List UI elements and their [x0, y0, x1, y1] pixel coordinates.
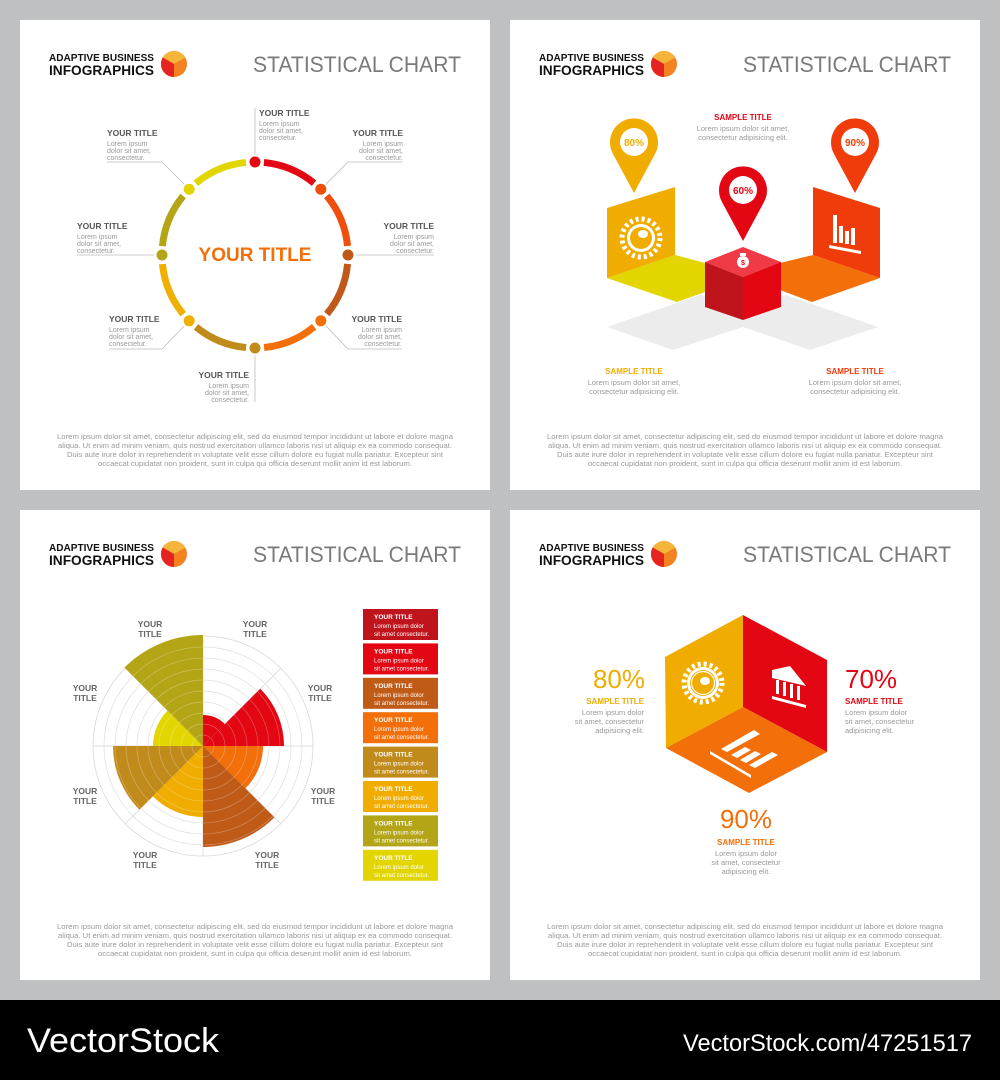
stat 90% — [711, 804, 781, 876]
stat 80%: 80% — [593, 664, 645, 694]
ring labels: Lorem ipsum — [259, 121, 300, 128]
ring labels: dolor sit amet, — [359, 148, 403, 155]
footer text — [57, 922, 454, 958]
stat 90%: sit amet, consectetur — [711, 858, 781, 867]
ring dots — [156, 156, 354, 354]
ring labels: consectetur. — [259, 135, 297, 142]
ring labels: Lorem ipsum — [363, 141, 403, 148]
cube — [665, 615, 827, 793]
stat 70% — [845, 664, 915, 735]
watermark band — [0, 1000, 1000, 1080]
legend: Lorem ipsum dolor — [374, 762, 424, 768]
right wall and floor — [780, 187, 880, 302]
icon: bar chart — [829, 215, 861, 254]
ring labels: YOUR TITLE — [352, 128, 403, 138]
legend: sit amet consectetur. — [374, 804, 429, 810]
stat 90%: SAMPLE TITLE — [717, 838, 776, 847]
stat 70%: 70% — [845, 664, 897, 694]
icon: bank — [772, 666, 806, 708]
legend: sit amet consectetur. — [374, 770, 429, 776]
pin 60%: 60% — [733, 186, 753, 197]
icon: gear — [684, 664, 722, 702]
stat 80%: SAMPLE TITLE — [586, 697, 645, 706]
polar labels: YOUR — [73, 683, 97, 693]
header — [539, 51, 951, 78]
polar labels: YOUR — [255, 850, 279, 860]
ring labels: YOUR TITLE — [198, 370, 249, 380]
ring labels: Lorem ipsum — [107, 141, 148, 148]
legend: YOUR TITLE — [374, 855, 413, 862]
watermark band: VectorStock.com/47251517 — [683, 1030, 972, 1057]
stat 70%: sit amet, consectetur — [845, 717, 915, 726]
legend: Lorem ipsum dolor — [374, 865, 424, 871]
ring labels: YOUR TITLE — [351, 314, 402, 324]
ring labels: consectetur. — [211, 397, 249, 404]
ring labels: dolor sit amet, — [109, 334, 153, 341]
legend: YOUR TITLE — [374, 683, 413, 690]
ring labels: consectetur. — [396, 248, 434, 255]
text: top sample: Lorem ipsum dolor sit amet, — [697, 124, 789, 133]
ring chart — [124, 124, 386, 386]
ring labels: Lorem ipsum — [362, 327, 402, 334]
left wall and floor — [607, 187, 705, 302]
polar labels — [73, 619, 335, 870]
stat 80%: adipisicing elit. — [595, 726, 644, 735]
ring labels: dolor sit amet, — [77, 241, 121, 248]
ring labels: YOUR TITLE — [383, 221, 434, 231]
center title: YOUR TITLE — [199, 245, 311, 266]
panel: polar chart — [20, 510, 490, 980]
ring labels: Lorem ipsum — [394, 234, 434, 241]
text: bottom right sample: Lorem ipsum dolor sit amet, — [809, 378, 901, 387]
pin 90% — [831, 118, 879, 193]
legend: Lorem ipsum dolor — [374, 796, 424, 802]
polar labels: TITLE — [243, 629, 267, 639]
panel: circular chart — [20, 20, 490, 490]
legend: sit amet consectetur. — [374, 873, 429, 879]
text: bottom left sample: Lorem ipsum dolor sit amet, — [588, 378, 680, 387]
legend: sit amet consectetur. — [374, 632, 429, 638]
legend — [363, 609, 438, 881]
legend: Lorem ipsum dolor — [374, 693, 424, 699]
stat 80%: Lorem ipsum dolor — [582, 708, 645, 717]
legend: Lorem ipsum dolor — [374, 727, 424, 733]
ring labels: YOUR TITLE — [107, 128, 158, 138]
text: top sample: consectetur adipisicing elit. — [698, 133, 788, 142]
polar labels: TITLE — [73, 796, 97, 806]
polar labels: TITLE — [138, 629, 162, 639]
stat 70%: Lorem ipsum dolor — [845, 708, 908, 717]
legend: sit amet consectetur. — [374, 838, 429, 844]
pin 80%: 80% — [624, 138, 644, 149]
polar labels: YOUR — [73, 786, 97, 796]
leader lines — [77, 108, 434, 402]
ring labels: consectetur. — [77, 248, 115, 255]
legend: YOUR TITLE — [374, 717, 413, 724]
footer text — [547, 432, 944, 468]
ring labels: dolor sit amet, — [358, 334, 402, 341]
legend: YOUR TITLE — [374, 752, 413, 759]
text: bottom left sample: SAMPLE TITLE — [605, 367, 664, 376]
stat 90%: adipisicing elit. — [722, 867, 770, 876]
ring labels: dolor sit amet, — [390, 241, 434, 248]
legend: sit amet consectetur. — [374, 701, 429, 707]
icon: gear — [622, 219, 660, 257]
header — [539, 541, 951, 568]
legend: YOUR TITLE — [374, 614, 413, 621]
text: top sample: SAMPLE TITLE — [714, 113, 773, 122]
text: bottom left sample: consectetur adipisicing elit. — [589, 387, 679, 396]
header — [49, 51, 461, 78]
ring labels: dolor sit amet, — [205, 390, 249, 397]
stat 70%: adipisicing elit. — [845, 726, 894, 735]
panel: isometric pins — [510, 20, 980, 490]
ring labels: YOUR TITLE — [259, 108, 310, 118]
text: bottom right sample — [809, 367, 901, 396]
icon: money bag: $ — [741, 260, 745, 267]
ring labels: dolor sit amet, — [259, 128, 303, 135]
pin 80% — [610, 118, 658, 193]
text: bottom right sample: SAMPLE TITLE — [826, 367, 885, 376]
legend: Lorem ipsum dolor — [374, 658, 424, 664]
footer text — [57, 432, 454, 468]
icon: isometric chart — [710, 730, 778, 778]
ring labels: consectetur. — [109, 341, 147, 348]
legend: YOUR TITLE — [374, 820, 413, 827]
pin 90%: 90% — [845, 138, 865, 149]
stat 70%: SAMPLE TITLE — [845, 697, 903, 706]
ring labels: YOUR TITLE — [109, 314, 160, 324]
polar labels: YOUR — [133, 850, 157, 860]
floor shadow — [607, 295, 878, 350]
watermark band: VectorStock — [27, 1022, 220, 1060]
stat 90%: Lorem ipsum dolor — [715, 849, 778, 858]
polar labels: TITLE — [255, 860, 279, 870]
text: bottom right sample: consectetur adipisicing elit. — [810, 387, 900, 396]
ring labels: consectetur. — [364, 341, 402, 348]
panel: hexagon cube — [510, 510, 980, 980]
pin 60% — [719, 166, 767, 241]
polar area chart — [93, 635, 313, 856]
text: bottom left sample — [588, 367, 680, 396]
polar labels: TITLE — [308, 693, 332, 703]
polar labels: YOUR — [243, 619, 267, 629]
legend: sit amet consectetur. — [374, 666, 429, 672]
footer text — [547, 922, 944, 958]
polar labels: YOUR — [308, 683, 332, 693]
ring labels — [77, 108, 434, 404]
legend: YOUR TITLE — [374, 648, 413, 655]
ring labels: dolor sit amet, — [107, 148, 151, 155]
text: top sample — [697, 113, 789, 142]
legend: Lorem ipsum dolor — [374, 830, 424, 836]
polar labels: YOUR — [311, 786, 335, 796]
ring labels: Lorem ipsum — [77, 234, 118, 241]
header — [49, 541, 461, 568]
legend: YOUR TITLE — [374, 786, 413, 793]
cube — [705, 247, 781, 320]
legend: sit amet consectetur. — [374, 735, 429, 741]
ring labels: Lorem ipsum — [209, 383, 249, 390]
polar labels: YOUR — [138, 619, 162, 629]
ring labels: consectetur. — [365, 155, 403, 162]
ring labels: YOUR TITLE — [77, 221, 128, 231]
ring labels: consectetur. — [107, 155, 145, 162]
stat 80%: sit amet, consectetur — [575, 717, 644, 726]
polar labels: TITLE — [73, 693, 97, 703]
polar labels: TITLE — [133, 860, 157, 870]
stat 80% — [575, 664, 645, 735]
legend: Lorem ipsum dolor — [374, 624, 424, 630]
ring labels: Lorem ipsum — [109, 327, 150, 334]
stat 90%: 90% — [720, 804, 772, 834]
polar labels: TITLE — [311, 796, 335, 806]
